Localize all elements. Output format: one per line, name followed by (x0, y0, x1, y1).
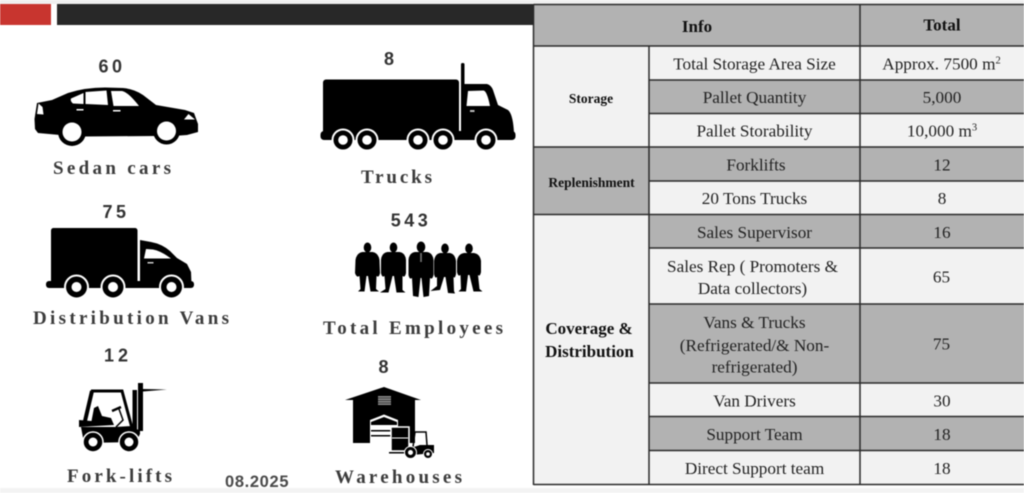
stat: fork-lifts (67, 346, 172, 487)
icon: forklift (79, 383, 167, 452)
label: Total Employees: Total Employees (323, 318, 503, 339)
label: Fork-lifts: Fork-lifts (67, 466, 172, 487)
row: Van Drivers: 30 (933, 392, 951, 410)
row: Van Drivers (713, 392, 951, 410)
icon: delivery van (46, 228, 194, 298)
row: Sales Rep: Data collectors) (698, 279, 807, 298)
row: Support Team: Support Team (706, 425, 803, 444)
label: Warehouses: Warehouses (335, 467, 462, 488)
number: 12: 12 (104, 346, 132, 366)
row: Vans and Trucks (680, 313, 950, 376)
row: Total Storage Area Size (673, 54, 1001, 74)
row: Forklifts: 12 (933, 156, 951, 174)
row: Forklifts: Forklifts (726, 156, 786, 174)
row: Direct Support team: Direct Support team (685, 459, 825, 478)
table cell backgrounds (533, 4, 1024, 485)
icon: sedan car (34, 88, 198, 146)
row: Pallet Storability: 10,000 m (907, 122, 972, 140)
row: Total Storage Area Size: Total Storage Area Size (673, 54, 836, 74)
row: 20 Tons Trucks: 20 Tons Trucks (702, 189, 808, 208)
row: Pallet Storability: 3 (972, 122, 977, 134)
row: Sales Rep (667, 257, 950, 298)
row: Total Storage Area Size: Approx. 7500 m (882, 54, 995, 74)
table header: Total: Total (923, 16, 961, 34)
stat: warehouses (335, 357, 462, 488)
label: Sedan cars: Sedan cars (53, 158, 171, 179)
row: 20 Tons Trucks (702, 189, 946, 208)
icon: warehouse with forklift (345, 387, 434, 458)
row: Forklifts (726, 156, 951, 174)
number: 8: 8 (384, 49, 394, 69)
row: Pallet Quantity (703, 88, 961, 107)
row: Support Team (706, 425, 951, 444)
icon: truck (320, 63, 516, 150)
icon: group of five people (355, 242, 482, 297)
row: Pallet Storability: Pallet Storability (696, 122, 813, 140)
table header: Info: Info (682, 17, 712, 36)
number: 8: 8 (378, 357, 389, 377)
category: Storage: Storage (569, 91, 613, 106)
row: Total Storage Area Size: 2 (995, 56, 1001, 66)
row: Vans and Trucks: (Refrigerated/& Non- (680, 336, 829, 355)
category: Coverage and Distribution: Coverage & (545, 319, 633, 338)
row: Direct Support team: 18 (933, 459, 951, 478)
row: Sales Supervisor (697, 223, 951, 242)
row: Direct Support team (685, 459, 951, 478)
row: Vans and Trucks: refrigerated) (712, 358, 797, 376)
category: Coverage and Distribution (545, 319, 634, 361)
stat: total employees (323, 210, 503, 339)
date: 08.2025 (225, 473, 288, 491)
row: Vans and Trucks: Vans & Trucks (703, 313, 806, 332)
row: Vans and Trucks: 75 (933, 334, 950, 354)
stat: distribution vans (33, 202, 229, 329)
row: Sales Supervisor: 16 (933, 223, 951, 242)
panel: info table (533, 4, 1024, 485)
stat: sedan cars (34, 56, 198, 179)
row: 20 Tons Trucks: 8 (938, 189, 946, 208)
row: Van Drivers: Van Drivers (713, 392, 796, 410)
category: Replenishment: Replenishment (548, 175, 635, 190)
category: Coverage and Distribution: Distribution (545, 342, 634, 361)
label: Distribution Vans: Distribution Vans (33, 308, 229, 329)
label: Trucks: Trucks (361, 167, 432, 188)
row: Sales Supervisor: Sales Supervisor (697, 223, 812, 242)
number: 60: 60 (98, 56, 126, 76)
row: Sales Rep: Sales Rep ( Promoters & (667, 257, 839, 276)
row: Support Team: 18 (933, 425, 951, 444)
number: 543: 543 (391, 210, 431, 230)
row: Pallet Quantity: 5,000 (923, 88, 961, 107)
stat: trucks (320, 49, 516, 188)
row: Pallet Storability (696, 122, 977, 140)
row: Sales Rep: 65 (933, 268, 950, 286)
header bar: red accent (0, 4, 51, 25)
row: Pallet Quantity: Pallet Quantity (703, 88, 807, 107)
header bar: dark (57, 4, 534, 25)
number: 75: 75 (102, 202, 130, 222)
